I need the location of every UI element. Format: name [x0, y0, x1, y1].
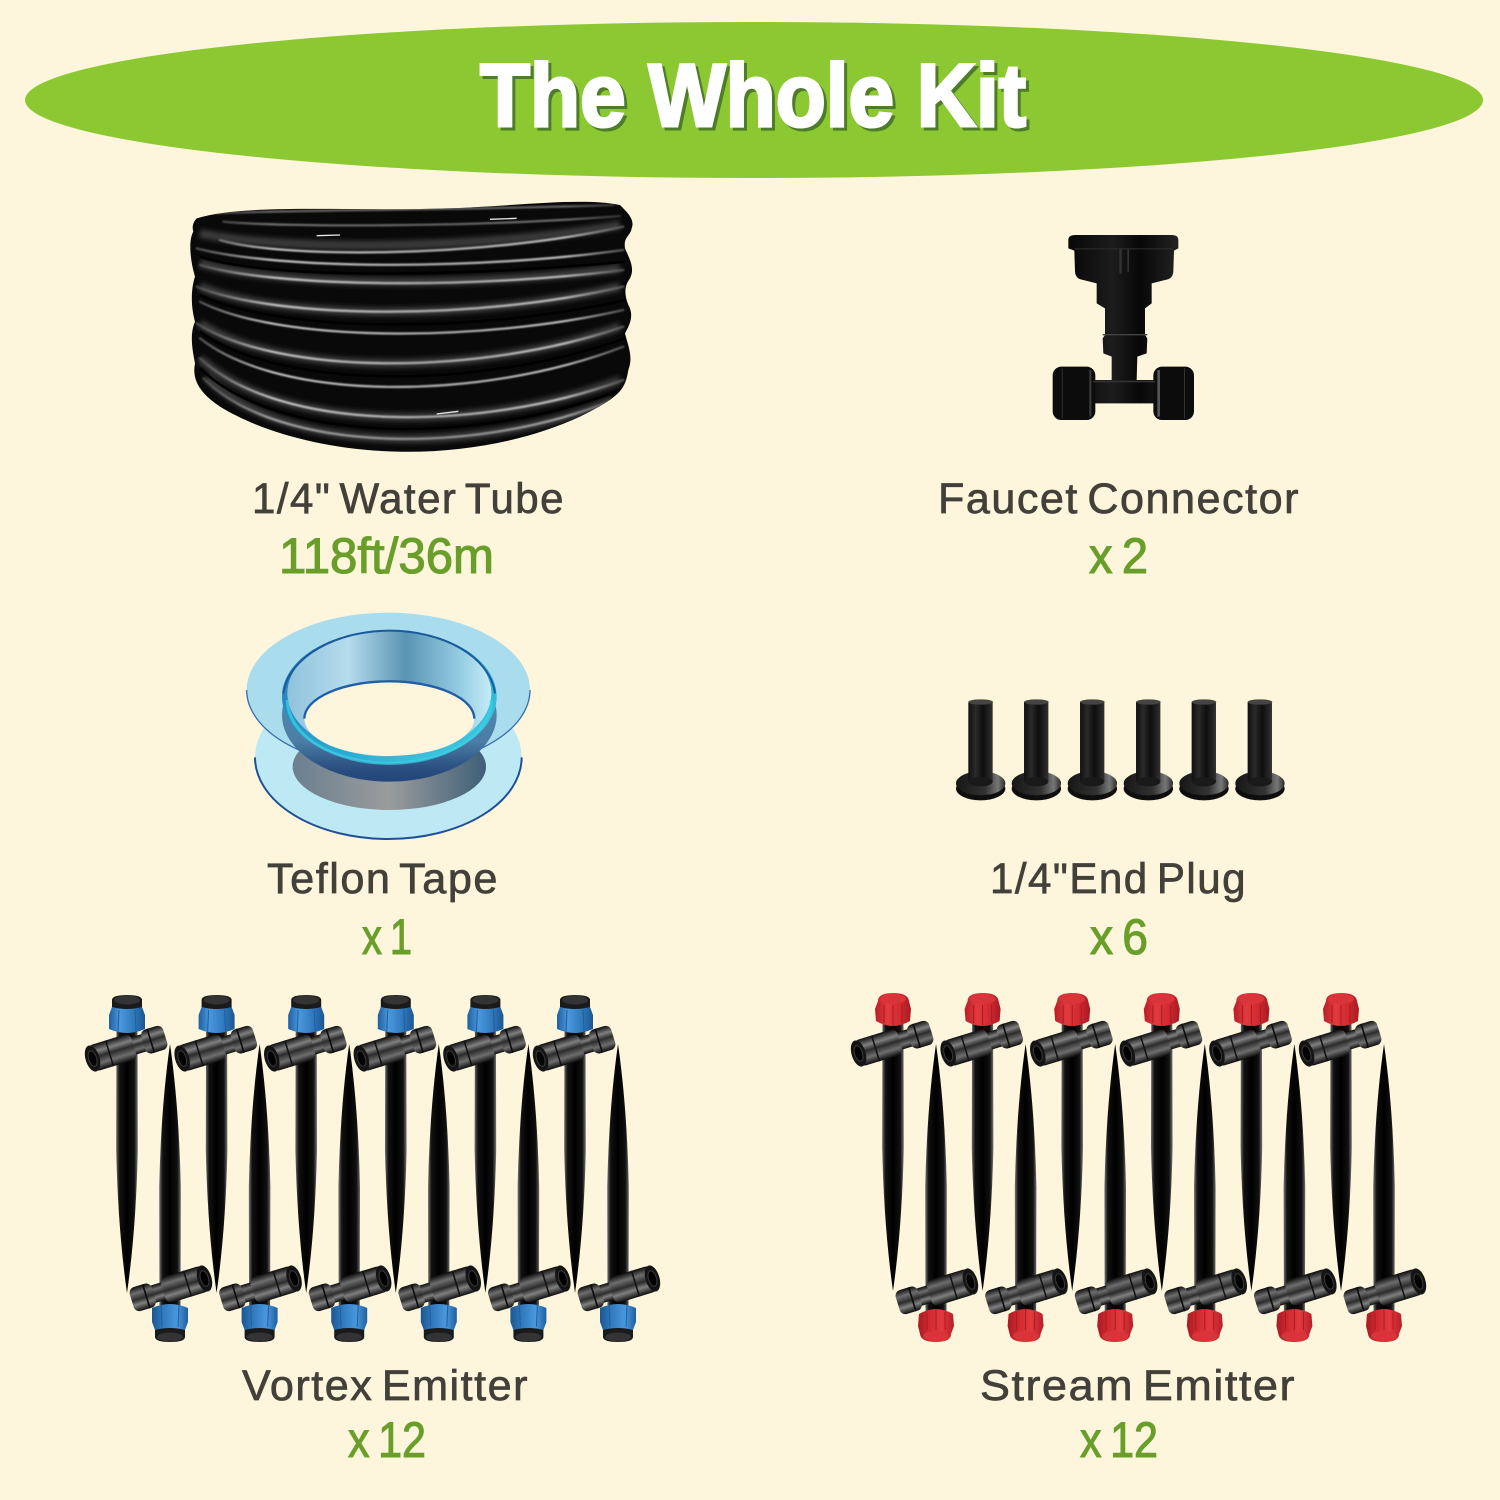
- label: vortex emitter: Vortex Emitter: [242, 1362, 529, 1410]
- teflon tape: [247, 613, 530, 839]
- label: faucet connector: Faucet Connector: [938, 475, 1300, 523]
- title banner: The Whole Kit: [483, 48, 1029, 148]
- end plugs: [956, 699, 1285, 800]
- label: teflon tape: Teflon Tape: [267, 855, 499, 903]
- quantity: stream emitter: x 12: [1080, 1412, 1158, 1468]
- label: water tube: 1/4" Water Tube: [252, 475, 565, 523]
- vortex emitters: [82, 995, 663, 1342]
- faucet connector: [1053, 235, 1194, 420]
- title banner: [25, 22, 1483, 178]
- stream emitters: [848, 993, 1429, 1342]
- quantity: teflon tape: x 1: [362, 909, 412, 965]
- quantity: vortex emitter: x 12: [348, 1412, 426, 1468]
- label: end plug: 1/4"End Plug: [990, 855, 1247, 903]
- title banner: The Whole Kit: [480, 45, 1026, 145]
- quantity: end plug: x 6: [1090, 909, 1148, 965]
- quantity: faucet connector: x 2: [1089, 528, 1148, 584]
- water tube coil: [190, 202, 632, 452]
- quantity: water tube length: 118ft/36m: [279, 528, 494, 584]
- label: stream emitter: Stream Emitter: [980, 1362, 1296, 1410]
